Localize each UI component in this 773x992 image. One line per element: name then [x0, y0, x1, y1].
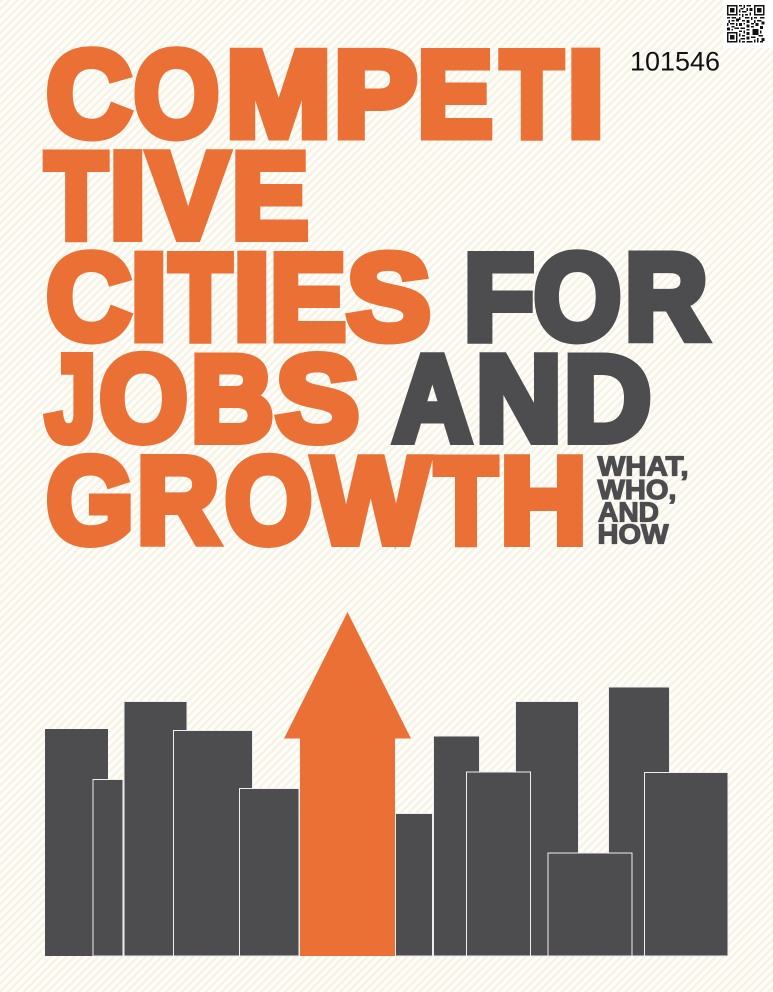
building right 4 — [516, 702, 578, 956]
title word: JOBS: B — [191, 330, 274, 466]
title line: COMPETI: E — [418, 26, 492, 162]
building right 2 — [434, 736, 480, 956]
title line: TIVE: V — [148, 128, 228, 264]
subtitle: what, who, and how: WHO, — [598, 474, 676, 505]
title word: CITIES: T — [170, 229, 231, 365]
title word: GROWTH: T — [435, 432, 497, 568]
icon: QR code — [723, 0, 773, 48]
title line: TIVE: I — [109, 128, 146, 264]
title word: JOBS: S — [276, 330, 359, 466]
title line: COMPETI: C — [46, 26, 132, 162]
building right 5 — [548, 853, 632, 956]
title word: AND: N — [476, 330, 562, 466]
title word: CITIES: I — [233, 229, 270, 365]
title line: TIVE: T — [45, 128, 107, 264]
title line: COMPETI: I — [567, 26, 604, 162]
title line: COMPETI: M — [226, 26, 331, 162]
title word: GROWTH: G — [46, 432, 134, 568]
subtitle: what, who, and how: AND — [598, 496, 659, 528]
title word: GROWTH: W — [313, 432, 429, 568]
building right 3 — [466, 772, 530, 956]
title word: AND: A — [393, 330, 471, 466]
building right 6 — [608, 687, 670, 956]
title word: GROWTH: O — [225, 432, 312, 568]
building left 4 — [174, 730, 252, 956]
building left 2 — [93, 780, 123, 956]
subtitle: what, who, and how — [598, 450, 688, 550]
title word: AND: D — [564, 330, 651, 466]
building left 5 — [240, 788, 299, 956]
building right 1 — [396, 814, 432, 956]
title word: CITIES: S — [347, 229, 430, 365]
skyline illustration — [45, 612, 728, 956]
title word: GROWTH: R — [137, 432, 219, 568]
title line: TIVE: E — [232, 128, 308, 264]
document number: 101546 — [630, 46, 720, 76]
title word: FOR: R — [625, 229, 708, 365]
title word: JOBS: J — [46, 330, 96, 466]
arrow: upward growth — [284, 612, 411, 956]
title line: COMPETI: P — [334, 26, 417, 162]
title line: COMPETI: T — [501, 26, 563, 162]
title word: GROWTH: H — [500, 432, 586, 568]
title word: FOR: O — [534, 229, 621, 365]
title word: JOBS: O — [100, 330, 188, 466]
title line: COMPETI: O — [134, 26, 219, 162]
title word: CITIES: I — [130, 229, 167, 365]
title word: CITIES: E — [270, 229, 346, 365]
title word: CITIES: C — [46, 229, 131, 365]
building left 1 — [45, 729, 108, 956]
subtitle: what, who, and how: HOW — [598, 518, 669, 550]
building right 7 — [644, 772, 728, 956]
subtitle: what, who, and how: WHAT, — [598, 450, 688, 482]
title word: FOR: F — [464, 229, 534, 365]
building left 3 — [124, 702, 187, 956]
title — [45, 26, 707, 568]
